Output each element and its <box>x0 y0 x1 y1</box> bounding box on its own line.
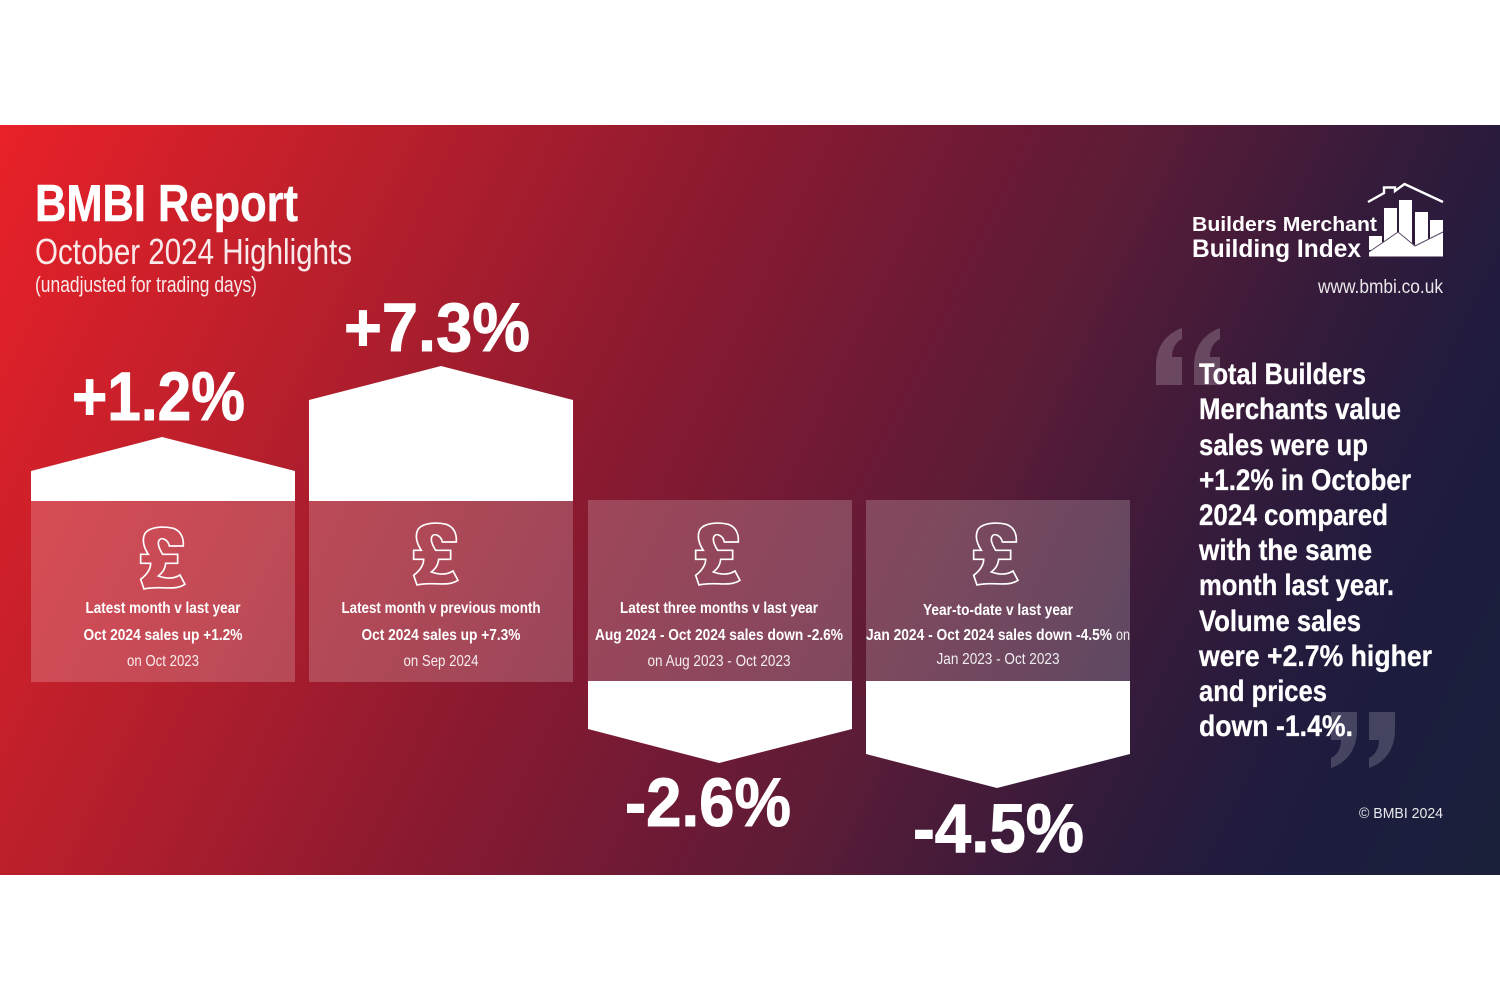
logo bars <box>1369 200 1443 250</box>
value: +7.3% <box>344 289 530 366</box>
value: -4.5% <box>913 790 1084 867</box>
website: www.bmbi.co.uk <box>1317 277 1443 298</box>
quote text: Total Builders <box>1199 358 1366 391</box>
note: (unadjusted for trading days) <box>35 272 257 297</box>
logo chart line <box>1369 232 1443 252</box>
quote text: with the same <box>1198 534 1372 567</box>
panel: latest month v last year: Oct 2024 sales up +1.2% <box>84 627 242 644</box>
value: -2.6% <box>625 764 791 841</box>
quote text: sales were up <box>1199 429 1368 462</box>
card text: Latest month v previous month <box>342 600 540 617</box>
quote text: down -1.4%. <box>1199 710 1353 743</box>
up arrow shape <box>309 366 573 501</box>
icon: closing quote marks <box>1331 712 1395 768</box>
card <box>588 500 852 681</box>
panel: latest three months v last year: Aug 2024 - Oct 2024 sales down -2.6% <box>595 627 843 644</box>
panel: latest month v previous month <box>309 289 573 682</box>
icon: pound sign <box>696 523 740 585</box>
panel: year-to-date v last year: Jan 2024 - Oct 2024 sales down -4.5% <box>866 627 1112 644</box>
logo chart area <box>1369 232 1443 256</box>
logo: Building Index <box>1192 235 1361 263</box>
icon: pound sign <box>414 523 458 585</box>
quote text: 2024 compared <box>1199 499 1388 532</box>
panel: year-to-date v last year <box>866 500 1130 867</box>
down arrow shape <box>866 681 1130 788</box>
quote text: Volume sales <box>1199 605 1361 638</box>
title: BMBI Report <box>35 175 298 233</box>
quote text: and prices <box>1199 675 1327 708</box>
quote text: Merchants value <box>1199 393 1401 426</box>
title block <box>35 175 352 297</box>
value: +1.2% <box>72 358 245 435</box>
icon: pound sign <box>141 527 185 589</box>
quote text <box>1198 358 1432 743</box>
logo roof <box>1368 184 1443 202</box>
card <box>866 500 1130 681</box>
quote text: +1.2% in October <box>1199 464 1411 497</box>
panel: latest month v last year: on Oct 2023 <box>127 653 199 670</box>
copyright: © BMBI 2024 <box>1359 805 1443 822</box>
logo <box>1192 184 1443 263</box>
icon: pound sign <box>974 523 1018 585</box>
card text: Latest month v last year <box>86 600 240 617</box>
background banner <box>0 125 1500 875</box>
card <box>31 501 295 682</box>
logo wordmark: Builders Merchant <box>1192 213 1377 236</box>
panel: latest three months v last year: on Aug 2023 - Oct 2023 <box>648 653 791 670</box>
quote text: were +2.7% higher <box>1198 640 1432 673</box>
card text: Latest three months v last year <box>620 600 818 617</box>
subtitle: October 2024 Highlights <box>35 231 352 272</box>
quote text: month last year. <box>1199 569 1394 602</box>
panel: latest month v previous month: on Sep 2024 <box>404 653 479 670</box>
down arrow shape <box>588 681 852 763</box>
up arrow shape <box>31 437 295 501</box>
card text: Year-to-date v last year <box>923 602 1073 619</box>
panel: latest month v previous month: Oct 2024 sales up +7.3% <box>362 627 520 644</box>
panel: year-to-date v last year: on <box>1116 627 1130 644</box>
card <box>309 501 573 682</box>
panel: latest month v last year <box>31 358 295 682</box>
panel: latest three months v last year <box>588 500 852 841</box>
icon: opening quote marks <box>1156 328 1220 385</box>
panel: year-to-date v last year: Jan 2023 - Oct 2023 <box>936 651 1060 668</box>
